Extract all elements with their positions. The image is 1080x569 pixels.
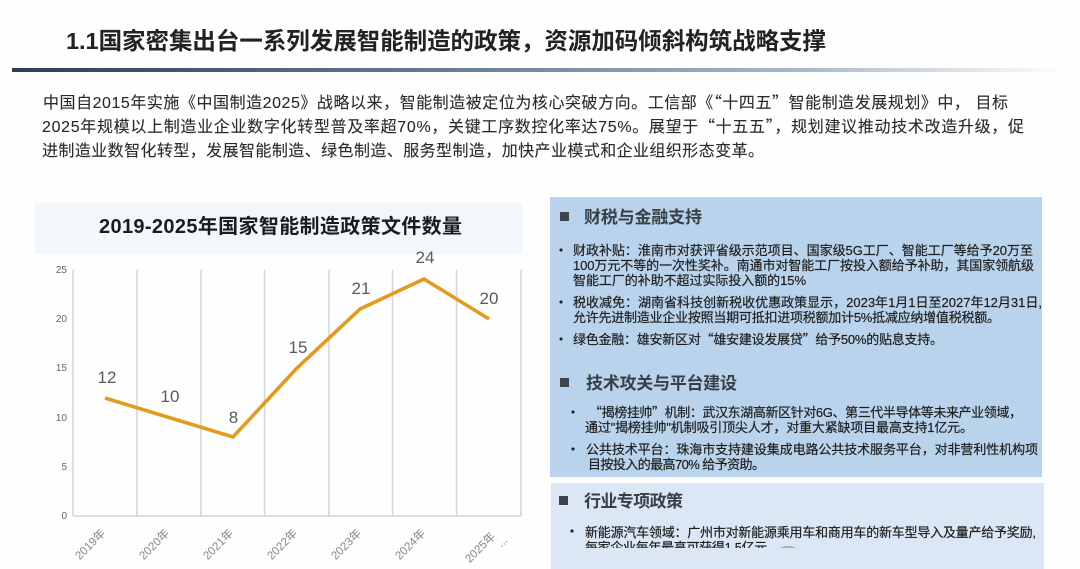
y axis labels: 10 <box>56 413 67 424</box>
industry bullet list <box>570 526 1035 548</box>
data value labels: 12 <box>98 368 116 387</box>
fiscal bullet list: 财政补贴：淮南市对获评省级示范项目、国家级5G工厂、智能工厂等给予20万至 <box>573 243 1033 258</box>
chart grid <box>73 270 521 516</box>
x axis labels: 2022年 <box>264 526 300 562</box>
x axis labels: 2025年 <box>462 529 498 565</box>
fiscal bullet list <box>560 243 1042 348</box>
intro text block <box>42 89 1024 160</box>
panel: line chart <box>35 203 522 565</box>
fiscal bullet list: 绿色金融：雄安新区对“雄安建设发展贷”给予50%的贴息支持。 <box>573 329 943 348</box>
panel: fiscal and technology policy <box>550 197 1042 477</box>
chart title <box>35 203 522 254</box>
y axis labels: 15 <box>56 363 67 374</box>
fiscal bullet list: 100万元不等的一次性奖补。南通市对智能工厂按投入额给予补助，其国家领航级 <box>573 258 1034 273</box>
data value labels: 8 <box>229 408 238 427</box>
fiscal bullet list: 允许先进制造业企业按照当期可抵扣进项税额加计5%抵减应纳增值税税额。 <box>573 310 1000 325</box>
chart title: 2019-2025年国家智能制造政策文件数量 <box>99 214 462 238</box>
x axis labels: 2024年 <box>392 526 428 562</box>
heading: fiscal and financial support: 财税与金融支持 <box>584 207 702 227</box>
technology bullet list: 目按投入的最高70% 给予资助。 <box>588 457 765 472</box>
data value labels: 20 <box>480 289 498 308</box>
intro text block: 中国自2015年实施《中国制造2025》战略以来，智能制造被定位为核心突破方向。工信部《“十四五”智能制造发展规划》中， 目标 <box>43 89 1008 113</box>
y axis labels: 0 <box>61 511 67 522</box>
y axis labels: 20 <box>56 314 67 325</box>
fiscal bullet list: 智能工厂的补助不超过实际投入额的15% <box>573 273 806 288</box>
x axis labels <box>72 526 510 565</box>
x axis labels: ... <box>495 535 510 550</box>
title underline rule <box>12 68 1068 72</box>
data value labels: 10 <box>161 387 179 406</box>
y axis labels <box>56 265 67 522</box>
title: 1.1国家密集出台一系列发展智能制造的政策，资源加码倾斜构筑战略支撑 <box>66 27 826 54</box>
technology bullet list: 通过"揭榜挂帅"机制吸引顶尖人才，对重大紧缺项目最高支持1亿元。 <box>585 420 973 435</box>
data line <box>105 279 489 437</box>
heading: technology and platforms: 技术攻关与平台建设 <box>586 373 737 393</box>
data value labels <box>98 248 498 427</box>
x axis labels: 2020年 <box>136 526 172 562</box>
intro text block: 2025年规模以上制造业企业数字化转型普及率超70%，关键工序数控化率达75%。展望于“十五五”，规划建议推动技术改造升级，促 <box>42 113 1024 137</box>
industry bullet list: 每家企业每年最高可获得1.5亿元。 <box>585 540 780 555</box>
technology bullet list <box>572 402 1038 472</box>
technology bullet list: 公共技术平台：珠海市支持建设集成电路公共技术服务平台，对非营利性机构项 <box>586 442 1038 457</box>
y axis labels: 25 <box>56 265 67 276</box>
data value labels: 24 <box>416 248 434 267</box>
heading: industry policy: 行业专项政策 <box>584 491 683 511</box>
intro text block: 进制造业数智化转型，发展智能制造、绿色制造、服务型制造，加快产业模式和企业组织形态变革。 <box>42 142 764 160</box>
y axis labels: 5 <box>61 462 67 473</box>
technology bullet list: “揭榜挂帅”机制：武汉东湖高新区针对6G、第三代半导体等未来产业领域， <box>589 402 1022 421</box>
fiscal bullet list: 税收减免：湖南省科技创新税收优惠政策显示，2023年1月1日至2027年12月31日, <box>573 295 1042 310</box>
x axis labels: 2019年 <box>72 526 108 562</box>
data value labels: 21 <box>352 279 370 298</box>
x axis labels: 2021年 <box>200 526 236 562</box>
panel: industry policy <box>551 483 1044 569</box>
x axis labels: 2023年 <box>328 526 364 562</box>
industry bullet list: 新能源汽车领域：广州市对新能源乘用车和商用车的新车型导入及量产给予奖励, <box>585 525 1036 540</box>
data value labels: 15 <box>289 338 307 357</box>
